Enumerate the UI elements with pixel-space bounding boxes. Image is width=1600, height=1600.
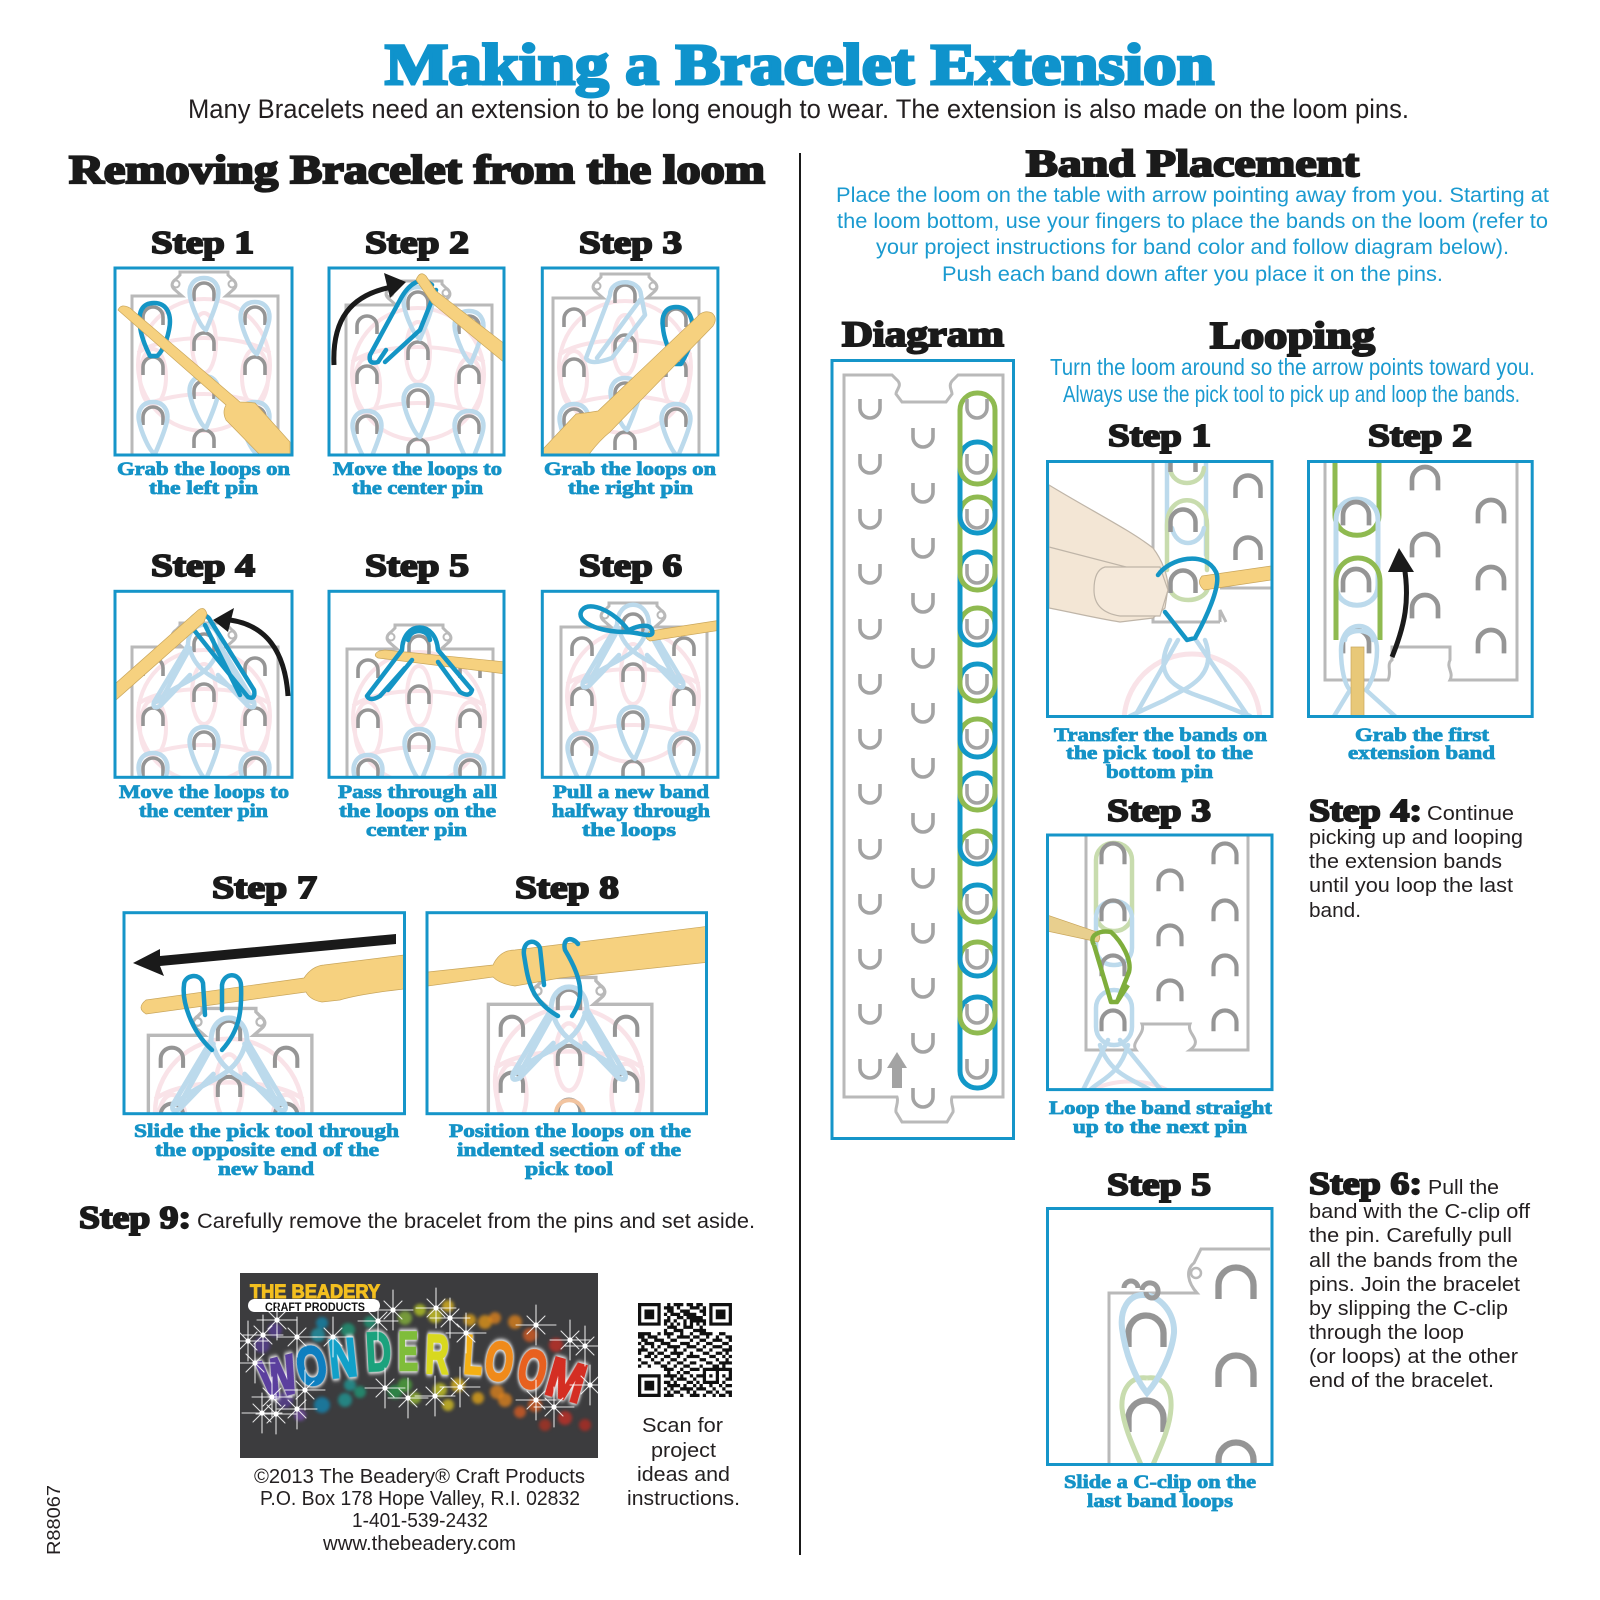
copyright block: P.O. Box 178 Hope Valley, R.I. 02832 <box>260 1487 580 1510</box>
looping step 1: bottom pin <box>1106 763 1214 783</box>
step 6: halfway through <box>552 802 711 822</box>
step 7: Slide the pick tool through <box>134 1122 400 1142</box>
panel: looping <box>1047 315 1535 1512</box>
step 4: the center pin <box>139 802 269 822</box>
looping step 5 <box>1048 1166 1272 1512</box>
step 9: Carefully remove the bracelet from the pins and set aside. <box>197 1210 755 1233</box>
looping step 5: last band loops <box>1087 1492 1233 1512</box>
wordmark: O <box>292 1334 332 1400</box>
looping step 6: (or loops) at the other <box>1309 1345 1518 1368</box>
looping step 4 <box>1309 792 1523 922</box>
step 6: Pull a new band <box>553 783 710 803</box>
wordmark: E <box>398 1322 418 1382</box>
looping step 6: all the bands from the <box>1309 1249 1518 1272</box>
looping step 2: Grab the first <box>1355 726 1490 746</box>
logo: the beadery wonder loom: CRAFT PRODUCTS <box>265 1300 365 1314</box>
step 7: new band <box>218 1160 315 1180</box>
step 8: indented section of the <box>457 1141 681 1161</box>
step 3: Grab the loops on <box>544 460 717 480</box>
step 8 <box>427 869 710 1197</box>
step 5: Pass through all <box>338 783 497 803</box>
arrow: move loops <box>334 273 406 365</box>
looping step 5: Slide a C-clip on the <box>1064 1473 1256 1493</box>
logo: the beadery wonder loom <box>228 1273 610 1458</box>
band placement instructions: Push each band down after you place it on the pins. <box>942 263 1443 286</box>
step 6: Step 6 <box>579 547 682 583</box>
looping step 6: pins. Join the bracelet <box>1309 1273 1520 1296</box>
wordmark: O <box>481 1329 517 1394</box>
title: Making a Bracelet Extension <box>385 32 1214 97</box>
step 3 <box>542 224 718 499</box>
heading: diagram: Diagram <box>842 314 1004 354</box>
heading: band placement: Band Placement <box>1026 143 1359 185</box>
step 5: center pin <box>366 821 468 841</box>
looping step 4: Step 4: <box>1309 792 1422 828</box>
looping step 6: Step 6: <box>1309 1165 1422 1201</box>
looping step 3: up to the next pin <box>1073 1118 1248 1138</box>
scan caption: instructions. <box>627 1487 740 1510</box>
looping step 6 <box>1309 1165 1530 1392</box>
band placement instructions: the loom bottom, use your fingers to place the bands on the loom (refer to <box>837 210 1548 233</box>
pins <box>860 399 933 1107</box>
copyright block: ©2013 The Beadery® Craft Products <box>254 1465 585 1488</box>
looping step 4: the extension bands <box>1309 850 1502 873</box>
looping step 6: through the loop <box>1309 1321 1464 1344</box>
wordmark: O <box>513 1336 553 1402</box>
copyright block: www.thebeadery.com <box>322 1532 516 1555</box>
step 5: Step 5 <box>365 547 469 583</box>
scan caption: Scan for <box>642 1414 723 1437</box>
looping step 2: extension band <box>1348 744 1496 764</box>
looping step 3: Step 3 <box>1107 792 1211 828</box>
looping step 4: band. <box>1309 899 1361 922</box>
step 7: the opposite end of the <box>155 1141 379 1161</box>
step 4: Step 4 <box>151 547 255 583</box>
copyright block: 1-401-539-2432 <box>352 1509 488 1532</box>
scan caption: ideas and <box>637 1463 730 1486</box>
step 5: the loops on the <box>339 802 496 822</box>
step 7 <box>122 876 406 1176</box>
arrow: up to next pin <box>1388 548 1414 657</box>
wordmark: W <box>253 1344 304 1412</box>
looping instructions <box>1050 354 1535 407</box>
step 1: the left pin <box>149 479 259 499</box>
looping step 4: picking up and looping <box>1309 826 1523 849</box>
looping step 6: end of the bracelet. <box>1309 1369 1494 1392</box>
wordmark: M <box>540 1345 593 1415</box>
step 1: Step 1 <box>151 224 254 260</box>
panel: band placement <box>836 143 1549 286</box>
looping step 4: Continue <box>1427 802 1514 825</box>
arrow: slide left <box>133 934 396 976</box>
looping step 3: Loop the band straight <box>1049 1099 1273 1119</box>
band placement instructions: your project instructions for band color and follow diagram below). <box>876 236 1509 259</box>
wordmark: N <box>326 1327 360 1391</box>
logo: the beadery wonder loom: THE BEADERY <box>250 1282 380 1303</box>
panel: removing bracelet from the loom <box>69 147 765 1235</box>
band placement instructions: Place the loom on the table with arrow pointing away from you. Starting at <box>836 184 1549 207</box>
looping step 1: Transfer the bands on <box>1054 726 1268 746</box>
bands <box>960 393 995 1088</box>
band placement instructions <box>836 184 1549 286</box>
wordmark: L <box>462 1325 485 1387</box>
looping step 5: Step 5 <box>1107 1166 1211 1202</box>
step 2: the center pin <box>352 479 484 499</box>
step 1: Grab the loops on <box>117 460 291 480</box>
copyright block <box>254 1465 585 1555</box>
loom outline <box>844 375 1003 1122</box>
subtitle: Many Bracelets need an extension to be long enough to wear. The extension is also made on the loom pins. <box>188 94 1409 124</box>
step 5 <box>329 547 506 841</box>
step 4 <box>115 547 292 822</box>
looping step 2 <box>1308 417 1532 764</box>
step 8: Position the loops on the <box>449 1122 691 1142</box>
wordmark <box>253 1320 593 1415</box>
looping step 6: band with the C-clip off <box>1309 1200 1530 1223</box>
looping step 2: Step 2 <box>1368 417 1472 453</box>
looping step 4: until you loop the last <box>1309 874 1513 897</box>
qr code <box>638 1305 732 1395</box>
step 9: Step 9: <box>79 1199 191 1235</box>
step 3: the right pin <box>568 479 694 499</box>
looping step 3 <box>1047 792 1273 1138</box>
step 1 <box>115 224 292 499</box>
step 7: Step 7 <box>212 869 317 905</box>
wordmark: R <box>425 1323 450 1386</box>
step 4: Move the loops to <box>119 783 289 803</box>
looping step 1: the pick tool to the <box>1066 744 1253 764</box>
icon: loom direction arrow <box>887 1052 907 1088</box>
product code: R88067 <box>43 1485 64 1555</box>
looping step 6: Pull the <box>1428 1176 1499 1199</box>
panel: diagram <box>832 314 1014 1138</box>
wordmark: D <box>364 1320 393 1383</box>
heading: removing bracelet: Removing Bracelet from the loom <box>69 147 765 192</box>
step 3: Step 3 <box>579 224 682 260</box>
heading: looping: Looping <box>1210 315 1375 357</box>
right column pins <box>967 399 987 1078</box>
step 8: pick tool <box>525 1160 613 1180</box>
looping instructions: Turn the loom around so the arrow points toward you. <box>1050 354 1535 380</box>
looping step 6: by slipping the C-clip <box>1309 1297 1508 1320</box>
step 9 <box>79 1199 755 1235</box>
step 2: Move the loops to <box>333 460 502 480</box>
step 6: the loops <box>582 821 676 841</box>
scan caption <box>627 1414 740 1510</box>
looping step 1 <box>1048 417 1273 790</box>
step 2 <box>329 224 506 499</box>
step 6 <box>542 547 721 841</box>
step 2: Step 2 <box>365 224 469 260</box>
looping step 1: Step 1 <box>1108 417 1211 453</box>
scan caption: project <box>651 1439 716 1462</box>
arrow: move to center <box>213 608 288 696</box>
step 8: Step 8 <box>515 869 619 905</box>
looping step 6: the pin. Carefully pull <box>1309 1224 1512 1247</box>
